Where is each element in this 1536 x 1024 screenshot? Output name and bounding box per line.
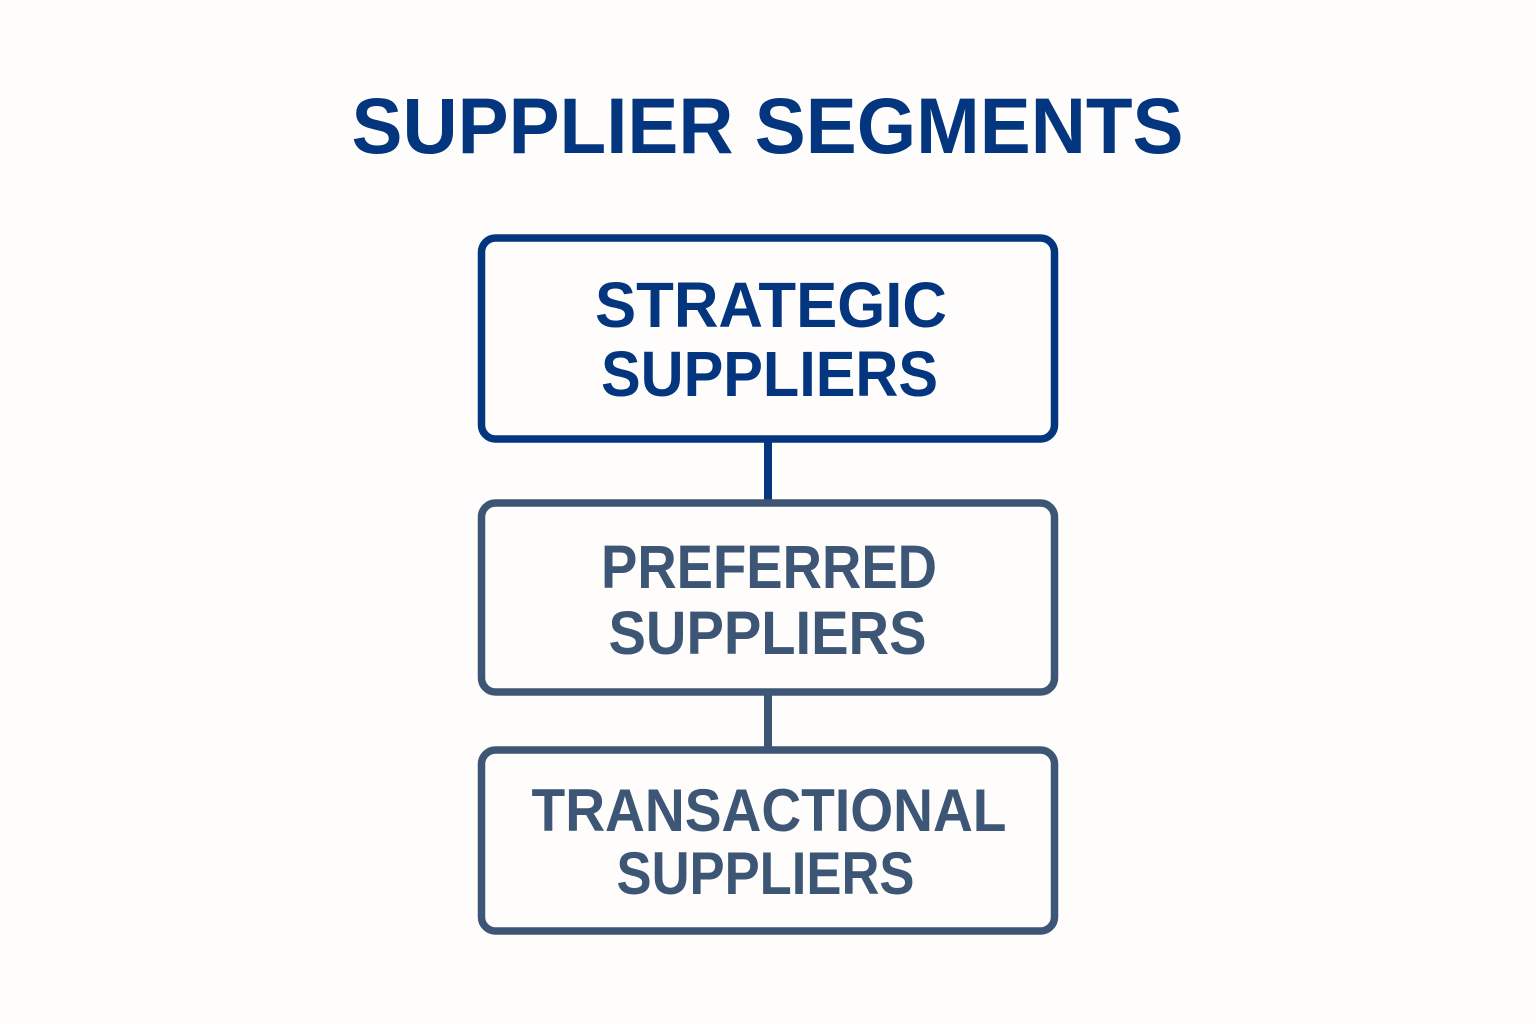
box: transactional suppliers: SUPPLIERS	[616, 840, 914, 907]
box: transactional suppliers	[482, 750, 1054, 931]
box: strategic suppliers	[482, 238, 1054, 439]
box: strategic suppliers: STRATEGIC	[595, 269, 947, 341]
box: preferred suppliers	[482, 503, 1054, 692]
connector: strategic to preferred	[764, 440, 772, 502]
box: preferred suppliers: SUPPLIERS	[608, 599, 926, 667]
box: preferred suppliers: PREFERRED	[601, 533, 937, 601]
title: SUPPLIER SEGMENTS	[352, 81, 1184, 170]
box: strategic suppliers: SUPPLIERS	[601, 338, 938, 410]
connector: preferred to transactional	[764, 692, 772, 750]
box: transactional suppliers: TRANSACTIONAL	[532, 777, 1006, 844]
